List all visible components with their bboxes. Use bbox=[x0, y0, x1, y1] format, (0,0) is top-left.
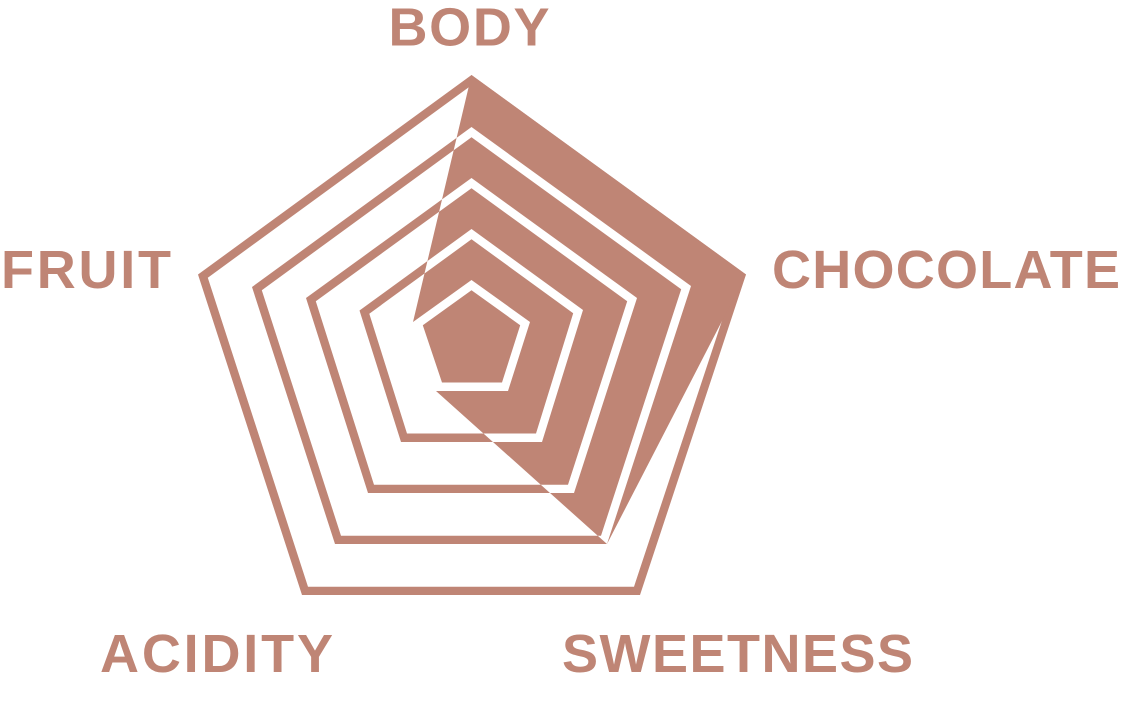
label: sweetness: SWEETNESS bbox=[562, 624, 913, 684]
label: fruit: FRUIT bbox=[1, 240, 171, 300]
label: chocolate: CHOCOLATE bbox=[772, 240, 1120, 300]
label: acidity: ACIDITY bbox=[100, 624, 333, 684]
radar chart bbox=[198, 75, 746, 595]
data polygon with inverted inner rings bbox=[252, 75, 746, 544]
outer pentagon ring bbox=[198, 75, 746, 595]
